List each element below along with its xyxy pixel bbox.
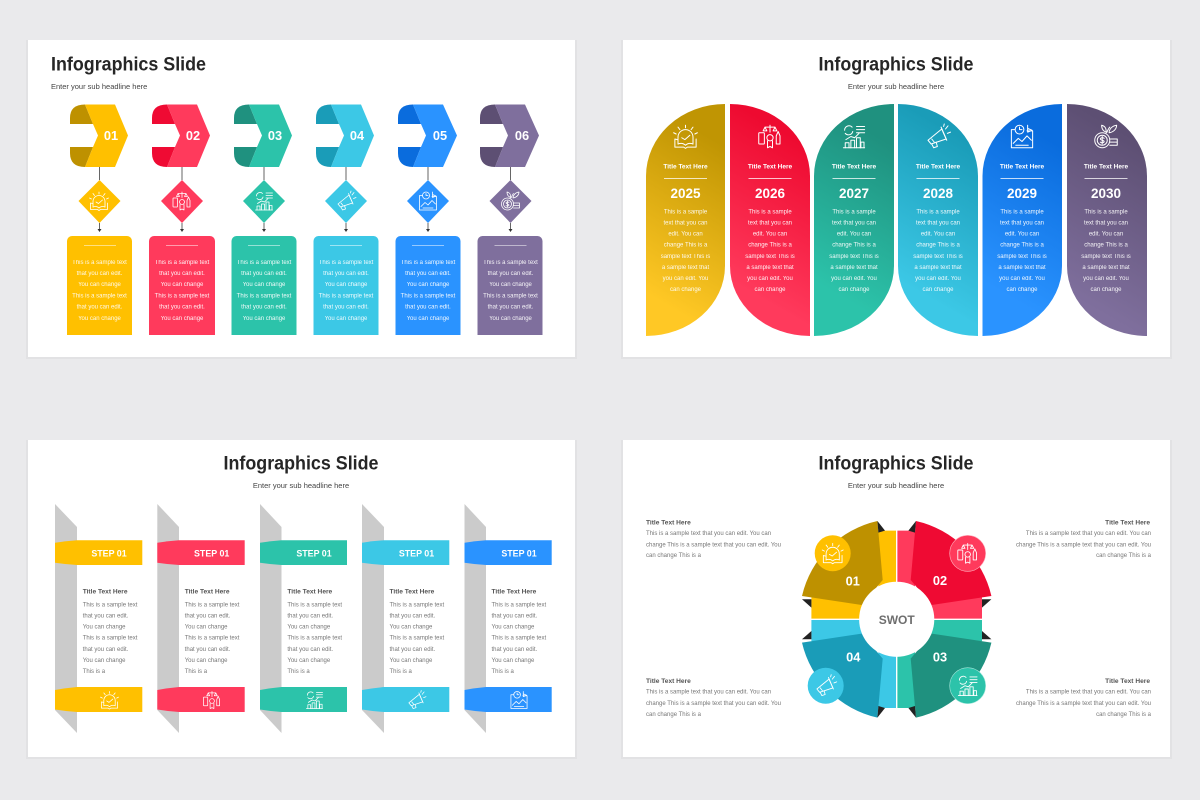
year 2025: can change <box>670 287 702 293</box>
text block: bottom right: Title Text Here <box>1105 678 1150 685</box>
step column 4: that you can edit. <box>390 614 436 620</box>
text block: top left: This is a sample text that you can edit. You can <box>646 531 771 537</box>
year 2027: Title Text Here <box>832 164 876 170</box>
text block: top right: This is a sample text that you can edit. You can <box>1026 531 1151 537</box>
step column 4: You can change <box>390 658 433 664</box>
text block: bottom left: Title Text Here <box>646 678 691 685</box>
year 2029: edit. You can <box>1005 232 1039 238</box>
step column 1: You can change <box>83 625 126 631</box>
icon badge: 02 <box>950 535 986 571</box>
step column 4: STEP 01 <box>399 548 434 558</box>
column 02 <box>149 104 215 335</box>
column 02: that you can edit. <box>159 271 205 277</box>
year 2027: a sample text that <box>830 265 878 271</box>
step column 1: This is a sample text <box>83 602 138 608</box>
column 04: that you can edit. <box>323 304 369 310</box>
text block: top right: can change This is a <box>1096 553 1152 559</box>
year 2028: edit. You can <box>921 232 955 238</box>
column 01 <box>67 104 132 335</box>
year 2030: a sample text that <box>1082 265 1130 271</box>
heading: panel 2 title: Infographics Slide <box>818 54 974 76</box>
column 03: that you can edit. <box>241 271 287 277</box>
column 05: You can change <box>407 282 450 288</box>
text block: bottom right: change This is a sample text that you can edit. You <box>1016 701 1151 707</box>
column 06: This is a sample text <box>483 294 538 300</box>
step column 4: This is a <box>390 669 413 675</box>
subheading: panel 3: Enter your sub headline here <box>253 481 349 490</box>
year 2028: change This is a <box>916 242 960 248</box>
column 05 <box>396 104 460 335</box>
quadrant 03 <box>897 620 991 718</box>
year 2030: change This is a <box>1084 242 1128 248</box>
panel: SWOT slide <box>623 440 1170 757</box>
column 01: This is a sample text <box>72 260 127 266</box>
step column 5: You can change <box>492 625 535 631</box>
column 03: 03 <box>268 128 282 143</box>
label: 02: 02 <box>933 573 947 588</box>
step column 1: This is a <box>83 669 106 675</box>
year 2025: you can edit. You <box>663 276 708 282</box>
year 2026: change This is a <box>748 242 792 248</box>
year 2029: 2029 <box>1007 186 1037 201</box>
text block: bottom left: change This is a sample text that you can edit. You <box>646 701 781 707</box>
year 2027: change This is a <box>832 242 876 248</box>
column 05: This is a sample text <box>401 294 456 300</box>
step column 2: This is a sample text <box>185 602 240 608</box>
year 2027: text that you can <box>832 220 876 226</box>
step column 1: that you can edit. <box>83 647 129 653</box>
step column 3: You can change <box>287 658 331 664</box>
text block: top right: Title Text Here <box>1105 520 1150 526</box>
quadrant 04 <box>802 620 896 718</box>
column 02: that you can edit. <box>159 304 205 310</box>
step column 5: STEP 01 <box>501 548 537 558</box>
year 2028: can change <box>922 287 954 293</box>
year 2028: This is a sample <box>916 210 960 216</box>
year 2029: sample text This is <box>997 254 1047 260</box>
text block: bottom left: can change This is a <box>646 712 702 718</box>
label: 01: 01 <box>846 574 860 588</box>
text block: top left: can change This is a <box>646 553 702 559</box>
column 06 <box>478 104 542 335</box>
column 05: 05 <box>433 128 447 143</box>
step column 5: This is a <box>492 669 515 675</box>
column 03: You can change <box>243 282 286 288</box>
heading: panel 1 title: Infographics Slide <box>51 54 206 76</box>
year 2028: you can edit. You <box>915 276 961 282</box>
column 04: This is a sample text <box>319 260 374 266</box>
quadrant 02 <box>897 521 991 619</box>
column 06: that you can edit. <box>488 304 534 310</box>
step column 3: You can change <box>287 625 331 631</box>
label: 04: 04 <box>846 650 861 664</box>
step column 3: This is a sample text <box>287 602 342 608</box>
year 2027: This is a sample <box>832 210 876 216</box>
text block: bottom left: This is a sample text that you can edit. You can <box>646 690 771 696</box>
column 05: You can change <box>407 316 450 322</box>
step column 5: This is a sample text <box>492 636 547 642</box>
step column 1: You can change <box>83 658 126 664</box>
step column 1: Title Text Here <box>83 588 128 596</box>
column 04: You can change <box>325 282 368 288</box>
year 2025: text that you can <box>663 220 708 226</box>
year 2026: This is a sample <box>748 210 792 216</box>
step column 2: that you can edit. <box>185 647 231 653</box>
panel: arrow flow slide <box>28 40 575 357</box>
column 05: that you can edit. <box>405 271 451 277</box>
step column 3 <box>260 504 347 733</box>
year 2029: This is a sample <box>1000 210 1044 216</box>
year 2028: 2028 <box>923 186 954 201</box>
column 03: This is a sample text <box>237 294 292 300</box>
column 04: You can change <box>325 316 368 322</box>
year 2025: edit. You can <box>668 232 703 238</box>
year 2030: text that you can <box>1084 220 1128 226</box>
column 06: 06 <box>515 128 529 143</box>
centre circle <box>859 582 934 657</box>
text block: top left: change This is a sample text that you can edit. You <box>646 542 781 548</box>
panel: timeline slide <box>623 40 1170 357</box>
year 2026: 2026 <box>755 186 786 201</box>
step column 2: Title Text Here <box>185 588 230 596</box>
text block: top right: change This is a sample text that you can edit. You <box>1016 542 1151 548</box>
icon badge: 04 <box>808 668 844 704</box>
year 2025: This is a sample <box>664 210 708 216</box>
column 02: You can change <box>161 316 204 322</box>
year 2030: edit. You can <box>1089 232 1123 238</box>
year 2029: you can edit. You <box>999 276 1045 282</box>
column 04: This is a sample text <box>319 294 374 300</box>
year 2027: edit. You can <box>837 232 871 238</box>
text block: bottom right <box>1016 678 1152 718</box>
subheading: panel 2: Enter your sub headline here <box>848 82 944 91</box>
column 05: This is a sample text <box>401 260 456 266</box>
year 2030 <box>1067 104 1147 336</box>
year 2030: sample text This is <box>1081 254 1131 260</box>
year 2030: 2030 <box>1091 186 1121 201</box>
year 2028 <box>898 104 978 336</box>
step column 2: STEP 01 <box>194 548 229 558</box>
column 04: that you can edit. <box>323 271 369 277</box>
year 2028: text that you can <box>916 220 960 226</box>
quadrant 01 <box>802 521 896 619</box>
year 2029: can change <box>1006 287 1038 293</box>
column 02: You can change <box>161 282 204 288</box>
step column 3: STEP 01 <box>296 548 332 558</box>
year 2026: Title Text Here <box>748 164 792 170</box>
text block: top left: Title Text Here <box>646 520 691 526</box>
year 2029: Title Text Here <box>1000 164 1044 170</box>
year 2027: sample text This is <box>829 254 879 260</box>
step column 4 <box>362 504 449 733</box>
column 01: This is a sample text <box>72 294 127 300</box>
step column 3: that you can edit. <box>287 647 333 653</box>
year 2025: a sample text that <box>662 265 710 271</box>
step column 2 <box>157 504 245 733</box>
year 2026 <box>730 104 810 336</box>
column 03 <box>232 104 296 335</box>
year 2027 <box>814 104 894 336</box>
column 02: This is a sample text <box>155 260 210 266</box>
year 2025: change This is a <box>664 242 708 248</box>
column 06: You can change <box>489 316 533 322</box>
year 2029 <box>982 104 1062 336</box>
step column 5: You can change <box>492 658 535 664</box>
year 2026: sample text This is <box>745 254 795 260</box>
year 2028: Title Text Here <box>916 164 960 170</box>
year 2025 <box>646 104 725 336</box>
step column 1 <box>55 504 142 733</box>
column 05: that you can edit. <box>405 304 451 310</box>
step column 5: Title Text Here <box>492 588 537 596</box>
column 01: 01 <box>104 128 118 143</box>
year 2026: text that you can <box>748 220 792 226</box>
step column 2: You can change <box>185 625 228 631</box>
text block: bottom left <box>646 678 781 718</box>
year 2025: Title Text Here <box>663 164 708 170</box>
column 01: You can change <box>78 316 122 322</box>
step column 3: This is a sample text <box>287 636 342 642</box>
subheading: panel 1: Enter your sub headline here <box>51 82 147 91</box>
column 01: that you can edit. <box>77 304 123 310</box>
step column 2: You can change <box>185 658 228 664</box>
column 04 <box>314 104 378 335</box>
year 2027: can change <box>838 287 870 293</box>
column 06: This is a sample text <box>483 260 538 266</box>
subheading: panel 4: Enter your sub headline here <box>848 481 944 490</box>
year 2029: change This is a <box>1000 242 1044 248</box>
year 2025: 2025 <box>670 186 701 201</box>
step column 4: This is a sample text <box>390 602 445 608</box>
column 01: You can change <box>78 282 122 288</box>
icon badge: 01 <box>815 535 851 571</box>
step column 4: that you can edit. <box>390 647 436 653</box>
SWOT wheel <box>802 521 991 718</box>
step column 2: This is a sample text <box>185 636 240 642</box>
step column 2: that you can edit. <box>185 614 231 620</box>
year 2029: a sample text that <box>998 265 1046 271</box>
step column 5: that you can edit. <box>492 614 538 620</box>
heading: panel 4 title: Infographics Slide <box>818 452 974 474</box>
column 03: This is a sample text <box>237 260 292 266</box>
column 06: You can change <box>489 282 533 288</box>
heading: panel 3 title: Infographics Slide <box>224 452 379 474</box>
text block: bottom right: This is a sample text that you can edit. You can <box>1026 690 1151 696</box>
step column 1: that you can edit. <box>83 614 129 620</box>
text block: top left <box>646 520 781 559</box>
step column 4: You can change <box>390 625 433 631</box>
year 2026: a sample text that <box>746 265 794 271</box>
year 2027: 2027 <box>839 186 869 201</box>
year 2030: you can edit. You <box>1083 276 1129 282</box>
step column 3: Title Text Here <box>287 588 333 596</box>
text block: bottom right: can change This is a <box>1096 712 1152 718</box>
year 2029: text that you can <box>1000 220 1044 226</box>
column 04: 04 <box>350 128 365 143</box>
column 02: This is a sample text <box>155 294 210 300</box>
step column 3: that you can edit. <box>287 614 333 620</box>
column 03: that you can edit. <box>241 304 287 310</box>
year 2028: a sample text that <box>914 265 962 271</box>
label: 03: 03 <box>933 650 947 664</box>
step column 5: This is a sample text <box>492 602 547 608</box>
year 2027: you can edit. You <box>831 276 877 282</box>
year 2028: sample text This is <box>913 254 963 260</box>
step column 4: This is a sample text <box>390 636 445 642</box>
step column 5 <box>464 504 552 733</box>
step column 2: This is a <box>185 669 208 675</box>
step column 3: This is a <box>287 669 310 675</box>
step column 1: This is a sample text <box>83 636 138 642</box>
column 06: that you can edit. <box>488 271 534 277</box>
step column 4: Title Text Here <box>390 588 435 596</box>
icon badge: 03 <box>950 668 986 704</box>
column 03: You can change <box>243 316 286 322</box>
step column 1: STEP 01 <box>91 548 127 558</box>
label: SWOT: SWOT <box>879 613 915 627</box>
year 2030: can change <box>1090 287 1122 293</box>
year 2030: Title Text Here <box>1084 164 1128 170</box>
year 2026: can change <box>754 287 786 293</box>
year 2026: you can edit. You <box>747 276 793 282</box>
year 2030: This is a sample <box>1084 210 1128 216</box>
column 01: that you can edit. <box>77 271 123 277</box>
year 2026: edit. You can <box>753 232 787 238</box>
text block: top right <box>1016 520 1152 559</box>
year 2025: sample text This is <box>661 254 710 260</box>
step column 5: that you can edit. <box>492 647 538 653</box>
column 02: 02 <box>186 128 200 143</box>
panel: steps slide <box>28 440 575 757</box>
